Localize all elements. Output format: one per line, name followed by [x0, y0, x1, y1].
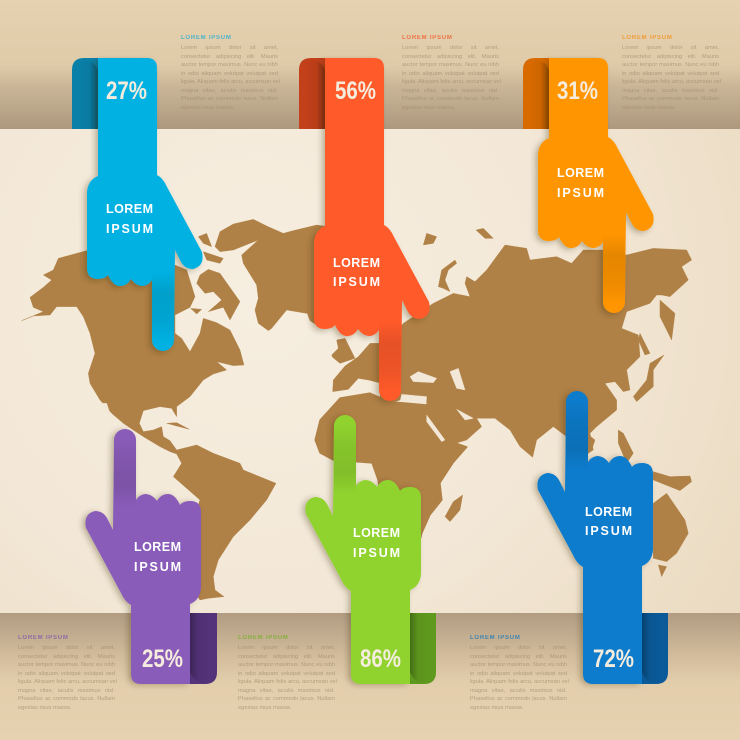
text block: green: auctor tempor maximus. Nunc eu nibh: [238, 662, 335, 668]
hand: 56%: [299, 58, 430, 401]
value: 27%: [106, 77, 147, 105]
text block: orange: consectetur adipiscing elit. Mauris: [622, 54, 719, 60]
fold: [190, 613, 217, 684]
hand: 86%: [305, 415, 436, 684]
text block: orange: auctor tempor maximus. Nunc eu nibh: [622, 62, 719, 68]
bottom band: [0, 613, 740, 740]
text block: purple: egestas risus massa.: [18, 704, 71, 710]
africa: [315, 393, 467, 560]
text block: purple: ligula. Aliquam felis arcu, accumsan vel: [18, 679, 117, 685]
greenland and arctic islands: [191, 219, 328, 331]
text block: purple: Lorem ipsum dolor sit amet,: [18, 645, 115, 651]
value: 31%: [557, 77, 598, 105]
text block: green: Phasellus ac commodo lacus. Nullam: [238, 696, 335, 702]
label line 2: IPSUM: [585, 524, 632, 538]
fold: [642, 613, 668, 684]
label: LOREM: [333, 256, 380, 270]
text block: blue: Lorem ipsum dolor sit amet,: [181, 45, 278, 51]
text block: orange: [622, 35, 721, 110]
hand shape: [314, 58, 430, 401]
hand shape: [305, 415, 421, 684]
world map: [22, 219, 692, 600]
label: LOREM: [134, 540, 181, 554]
text block: blue: Phasellus ac commodo lacus. Nullam: [181, 96, 278, 102]
europe: [307, 312, 382, 392]
caribbean details: [102, 403, 113, 422]
text block: green: egestas risus massa.: [238, 704, 291, 710]
text block: blue: magna vitae, iaculis maximus nisl.: [181, 88, 278, 94]
label line 2: IPSUM: [134, 560, 181, 574]
text block: dark blue: [470, 635, 569, 710]
text block: dark blue: consectetur adipiscing elit. Mauris: [470, 654, 567, 660]
hand shape: [87, 58, 203, 351]
text block: dark blue: Phasellus ac commodo lacus. Nullam: [470, 696, 567, 702]
label: LOREM: [353, 526, 400, 540]
text block: green: consectetur adipiscing elit. Mauris: [238, 654, 335, 660]
americas: [22, 251, 276, 600]
text block: purple: [18, 635, 117, 710]
label: LOREM: [557, 166, 604, 180]
label: LOREM: [585, 505, 632, 519]
fold: [410, 613, 436, 684]
text block: purple: auctor tempor maximus. Nunc eu nibh: [18, 662, 115, 668]
hand shape: [537, 391, 653, 684]
text block: purple: Phasellus ac commodo lacus. Nullam: [18, 696, 115, 702]
text block: green: LOREM IPSUM: [238, 635, 289, 641]
fold: [523, 58, 549, 129]
text block: purple: LOREM IPSUM: [18, 635, 69, 641]
text block: red: ligula. Aliquam felis arcu, accumsan vel: [402, 79, 501, 85]
hand: 25%: [85, 429, 217, 684]
text block: dark blue: in odio aliquam volutpat volutpat sed: [470, 670, 567, 676]
text block: purple: magna vitae, iaculis maximus nisl.: [18, 688, 115, 694]
cuba: [167, 423, 189, 429]
hand: 72%: [537, 391, 668, 684]
text block: orange: Lorem ipsum dolor sit amet,: [622, 45, 719, 51]
text block: blue: [181, 35, 280, 110]
text block: red: Phasellus ac commodo lacus. Nullam: [402, 96, 499, 102]
islands: [423, 228, 692, 577]
text block: green: Lorem ipsum dolor sit amet,: [238, 645, 335, 651]
label line 2: IPSUM: [353, 546, 400, 560]
text block: dark blue: magna vitae, iaculis maximus nisl.: [470, 688, 567, 694]
value: 56%: [335, 77, 376, 105]
top band: [0, 0, 740, 129]
label line 2: IPSUM: [557, 186, 604, 200]
text block: green: ligula. Aliquam felis arcu, accumsan vel: [238, 679, 337, 685]
text block: blue: auctor tempor maximus. Nunc eu nibh: [181, 62, 278, 68]
text block: purple: in odio aliquam volutpat volutpat sed: [18, 670, 115, 676]
hand: 31%: [523, 58, 654, 313]
text block: orange: LOREM IPSUM: [622, 35, 673, 41]
label line 2: IPSUM: [106, 222, 153, 236]
fold: [299, 58, 325, 129]
text block: dark blue: ligula. Aliquam felis arcu, accumsan vel: [470, 679, 569, 685]
text block: red: auctor tempor maximus. Nunc eu nibh: [402, 62, 499, 68]
text block: blue: ligula. Aliquam felis arcu, accumsan vel: [181, 79, 280, 85]
text block: dark blue: LOREM IPSUM: [470, 635, 521, 641]
value: 25%: [142, 645, 183, 673]
text block: orange: egestas risus massa.: [622, 104, 675, 110]
text block: red: consectetur adipiscing elit. Mauris: [402, 54, 499, 60]
fold: [72, 58, 98, 129]
text block: dark blue: egestas risus massa.: [470, 704, 523, 710]
text block: purple: consectetur adipiscing elit. Mauris: [18, 654, 115, 660]
text block: red: [402, 35, 501, 110]
text block: green: magna vitae, iaculis maximus nisl.: [238, 688, 335, 694]
text block: green: [238, 635, 337, 710]
text block: dark blue: auctor tempor maximus. Nunc eu nibh: [470, 662, 567, 668]
text block: blue: egestas risus massa.: [181, 104, 234, 110]
text block: red: egestas risus massa.: [402, 104, 455, 110]
text block: orange: in odio aliquam volutpat volutpat sed: [622, 70, 719, 76]
text block: dark blue: Lorem ipsum dolor sit amet,: [470, 645, 567, 651]
text block: orange: ligula. Aliquam felis arcu, accumsan vel: [622, 79, 721, 85]
text block: red: LOREM IPSUM: [402, 35, 453, 41]
text block: orange: Phasellus ac commodo lacus. Nullam: [622, 96, 719, 102]
seas: [400, 368, 473, 442]
text block: red: magna vitae, iaculis maximus nisl.: [402, 88, 499, 94]
text block: red: in odio aliquam volutpat volutpat sed: [402, 70, 499, 76]
hand shape: [538, 58, 654, 313]
label: LOREM: [106, 202, 153, 216]
value: 86%: [360, 645, 401, 673]
asia: [380, 245, 692, 457]
text block: green: in odio aliquam volutpat volutpat sed: [238, 670, 335, 676]
text block: blue: consectetur adipiscing elit. Mauris: [181, 54, 278, 60]
text block: blue: LOREM IPSUM: [181, 35, 232, 41]
label line 2: IPSUM: [333, 275, 380, 289]
text block: blue: in odio aliquam volutpat volutpat sed: [181, 70, 278, 76]
hand: 27%: [72, 58, 203, 351]
value: 72%: [593, 645, 634, 673]
text block: red: Lorem ipsum dolor sit amet,: [402, 45, 499, 51]
text block: orange: magna vitae, iaculis maximus nisl.: [622, 88, 719, 94]
hand shape: [85, 429, 201, 684]
